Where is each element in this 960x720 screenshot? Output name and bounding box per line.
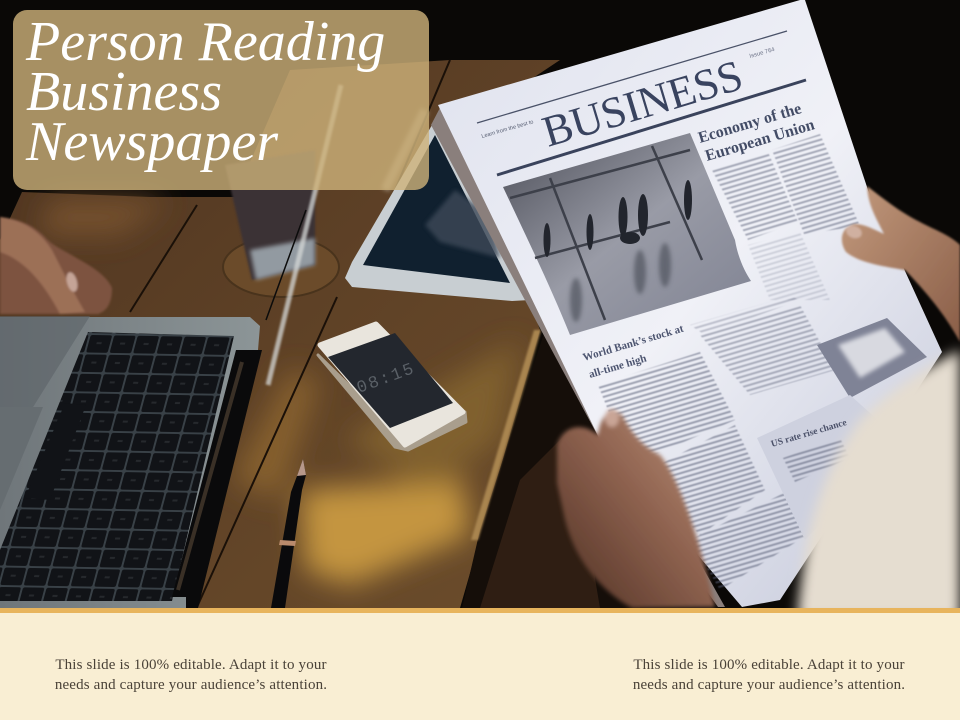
tablet screen xyxy=(363,135,510,283)
footer text right: needs and capture your audience’s attention. xyxy=(633,677,905,693)
headline: World Bank's stock at all-time high: World Bank’s stock at xyxy=(581,323,685,364)
title: Business xyxy=(26,61,222,123)
headline: World Bank's stock at all-time high: all-time high xyxy=(587,352,648,381)
headline: Economy of the European Union: Economy of the xyxy=(696,100,803,147)
title: Person Reading xyxy=(26,11,385,73)
wooden table top xyxy=(0,60,560,608)
article columns: World Bank xyxy=(598,296,835,590)
masthead: BUSINESS: BUSINESS xyxy=(537,50,748,157)
glass xyxy=(225,150,315,280)
icon: drink glass on cork coaster xyxy=(223,150,339,297)
tablet body xyxy=(345,125,530,301)
smartphone showing 08:15 xyxy=(318,324,466,450)
blurred white shirt in foreground xyxy=(798,350,960,620)
footer text right: This slide is 100% editable. Adapt it to your xyxy=(633,657,905,673)
article columns: European Union xyxy=(712,134,860,300)
laptop xyxy=(0,316,262,608)
newspaper page xyxy=(438,0,942,607)
tablet xyxy=(345,125,530,301)
title panel xyxy=(13,10,429,190)
sunlight patches xyxy=(40,200,520,585)
left hand resting on the table xyxy=(0,217,112,314)
footer text left: needs and capture your audience’s attention. xyxy=(55,677,327,693)
newspaper xyxy=(431,0,942,607)
phone screen xyxy=(328,333,453,428)
footer text left: This slide is 100% editable. Adapt it to your xyxy=(55,657,327,673)
headline: US rate rise chance: US rate rise chance xyxy=(770,418,848,450)
phone clock: 08:15 xyxy=(355,360,418,399)
laptop screen edge seen through xyxy=(266,85,425,385)
title: Newspaper xyxy=(26,111,278,173)
title xyxy=(26,11,385,173)
masthead issue info: Issue 764 xyxy=(749,47,776,60)
newspaper page spine xyxy=(431,104,725,607)
keyboard xyxy=(0,332,234,601)
phone body xyxy=(320,324,463,445)
window frames xyxy=(510,146,702,320)
accent bar xyxy=(0,608,960,613)
footer text left xyxy=(55,657,327,693)
table side edge and chair below newspaper xyxy=(462,330,640,608)
cork coaster xyxy=(223,237,339,297)
right hand holding newspaper xyxy=(842,186,960,342)
footer panel xyxy=(0,613,960,720)
article box: US rate rise chance xyxy=(757,395,900,540)
headline: Economy of the European Union: European Union xyxy=(703,116,817,165)
laptop body xyxy=(0,317,260,608)
speaker grille and hinge xyxy=(172,350,262,608)
lower hand holding newspaper xyxy=(557,409,715,608)
inset photo xyxy=(817,318,927,398)
silhouettes of walking people xyxy=(544,180,692,257)
trackpad xyxy=(0,407,43,510)
phone shadow edge xyxy=(318,355,466,450)
masthead left note: Learn from the best to xyxy=(481,119,534,140)
main newspaper photo xyxy=(503,133,751,335)
floor reflections xyxy=(570,243,671,322)
table plank seams xyxy=(130,60,450,607)
masthead rules xyxy=(477,31,787,123)
pen xyxy=(271,459,306,608)
footer text right xyxy=(633,657,905,693)
space bar xyxy=(25,403,86,500)
